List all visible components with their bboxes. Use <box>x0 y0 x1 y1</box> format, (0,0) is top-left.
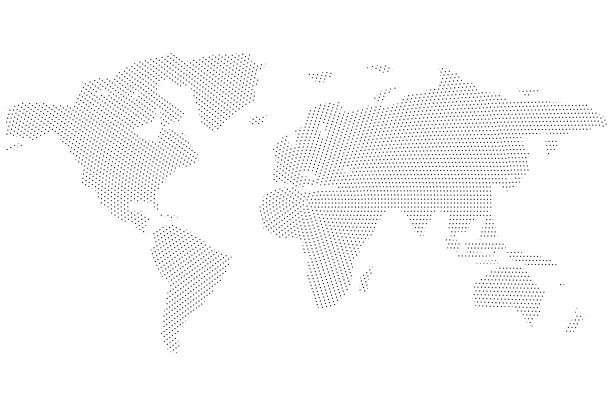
dotted world map <box>6 53 606 354</box>
